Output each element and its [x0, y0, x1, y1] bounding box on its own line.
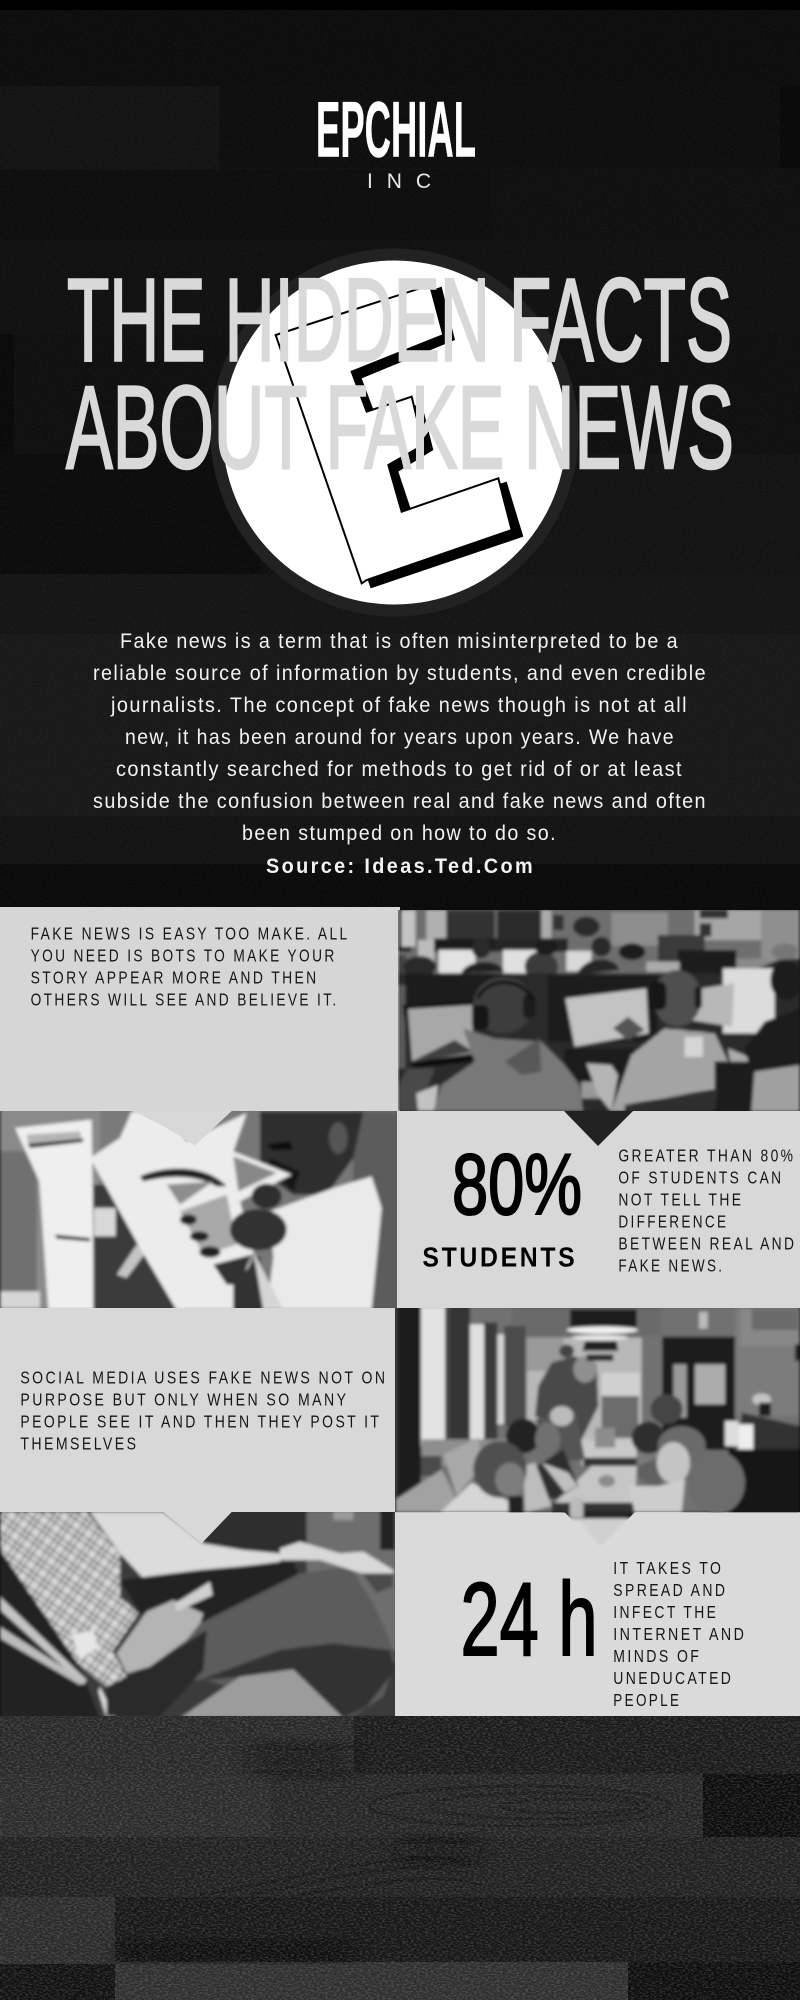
text block: IT TAKES TO — [613, 1558, 723, 1578]
text block — [613, 1558, 746, 1710]
photo: restaurant table — [395, 1306, 800, 1553]
text block: PURPOSE BUT ONLY WHEN SO MANY — [20, 1389, 348, 1409]
text block: PEOPLE — [613, 1690, 681, 1710]
text block: UNEDUCATED — [613, 1668, 733, 1688]
text block: SOCIAL MEDIA USES FAKE NEWS NOT ON — [20, 1367, 387, 1387]
big number 24 h: 24 h — [460, 1562, 598, 1678]
intro paragraph: new, it has been around for years upon years. We have — [125, 726, 675, 749]
text block: PEOPLE SEE IT AND THEN THEY POST IT — [20, 1411, 381, 1431]
panel: 80% students — [397, 1111, 800, 1308]
photo: child with newspaper — [0, 1108, 400, 1311]
light notch — [163, 1512, 232, 1543]
photo: person with phone — [0, 1510, 397, 1718]
source line: Source: Ideas.Ted.Com — [266, 855, 535, 878]
intro paragraph — [93, 630, 707, 878]
text block: OTHERS WILL SEE AND BELIEVE IT. — [31, 989, 339, 1009]
text block: MINDS OF — [613, 1646, 701, 1666]
panel: 24 h — [395, 1512, 800, 1716]
light notch — [133, 1111, 232, 1145]
label students: STUDENTS — [422, 1242, 577, 1272]
text block: INTERNET AND — [613, 1624, 746, 1644]
dark wood background: bottom — [0, 1716, 800, 2000]
logo: EPCHIAL INC — [316, 84, 476, 193]
text block: STORY APPEAR MORE AND THEN — [31, 967, 319, 987]
panel: fake news is easy — [0, 907, 400, 1111]
intro paragraph: journalists. The concept of fake news though is not at all — [110, 694, 688, 717]
icon: letter E — [276, 285, 523, 588]
logo subline: INC — [367, 170, 431, 193]
intro paragraph: constantly searched for methods to get rid of or at least — [116, 758, 683, 781]
text block — [618, 1146, 796, 1276]
title — [66, 254, 734, 494]
intro paragraph: been stumped on how to do so. — [242, 822, 557, 845]
text block: THEMSELVES — [20, 1433, 138, 1453]
panel: social media — [0, 1308, 395, 1512]
intro paragraph: subside the confusion between real and fake news and often — [93, 790, 707, 813]
text block: NOT TELL THE — [618, 1190, 743, 1210]
text block — [20, 1367, 387, 1453]
intro paragraph: reliable source of information by students, and even credible — [93, 662, 707, 685]
text block: INFECT THE — [613, 1602, 718, 1622]
notch: dark triangle under computer photo — [564, 1111, 633, 1146]
text block: DIFFERENCE — [618, 1212, 728, 1232]
text block: FAKE NEWS. — [618, 1256, 724, 1276]
text block: FAKE NEWS IS EASY TOO MAKE. ALL — [31, 923, 350, 943]
emblem: E in a circle — [210, 248, 578, 616]
text block: SPREAD AND — [613, 1580, 727, 1600]
photo: students at computers — [398, 908, 800, 1112]
text block: YOU NEED IS BOTS TO MAKE YOUR — [31, 945, 337, 965]
big number 80%: 80% — [452, 1137, 582, 1233]
intro paragraph: Fake news is a term that is often misinterpreted to be a — [120, 630, 679, 653]
text block — [31, 923, 350, 1009]
text: EPCHIAL — [316, 84, 476, 174]
dark wood background: top — [0, 0, 800, 907]
notch mask — [395, 1512, 800, 1522]
